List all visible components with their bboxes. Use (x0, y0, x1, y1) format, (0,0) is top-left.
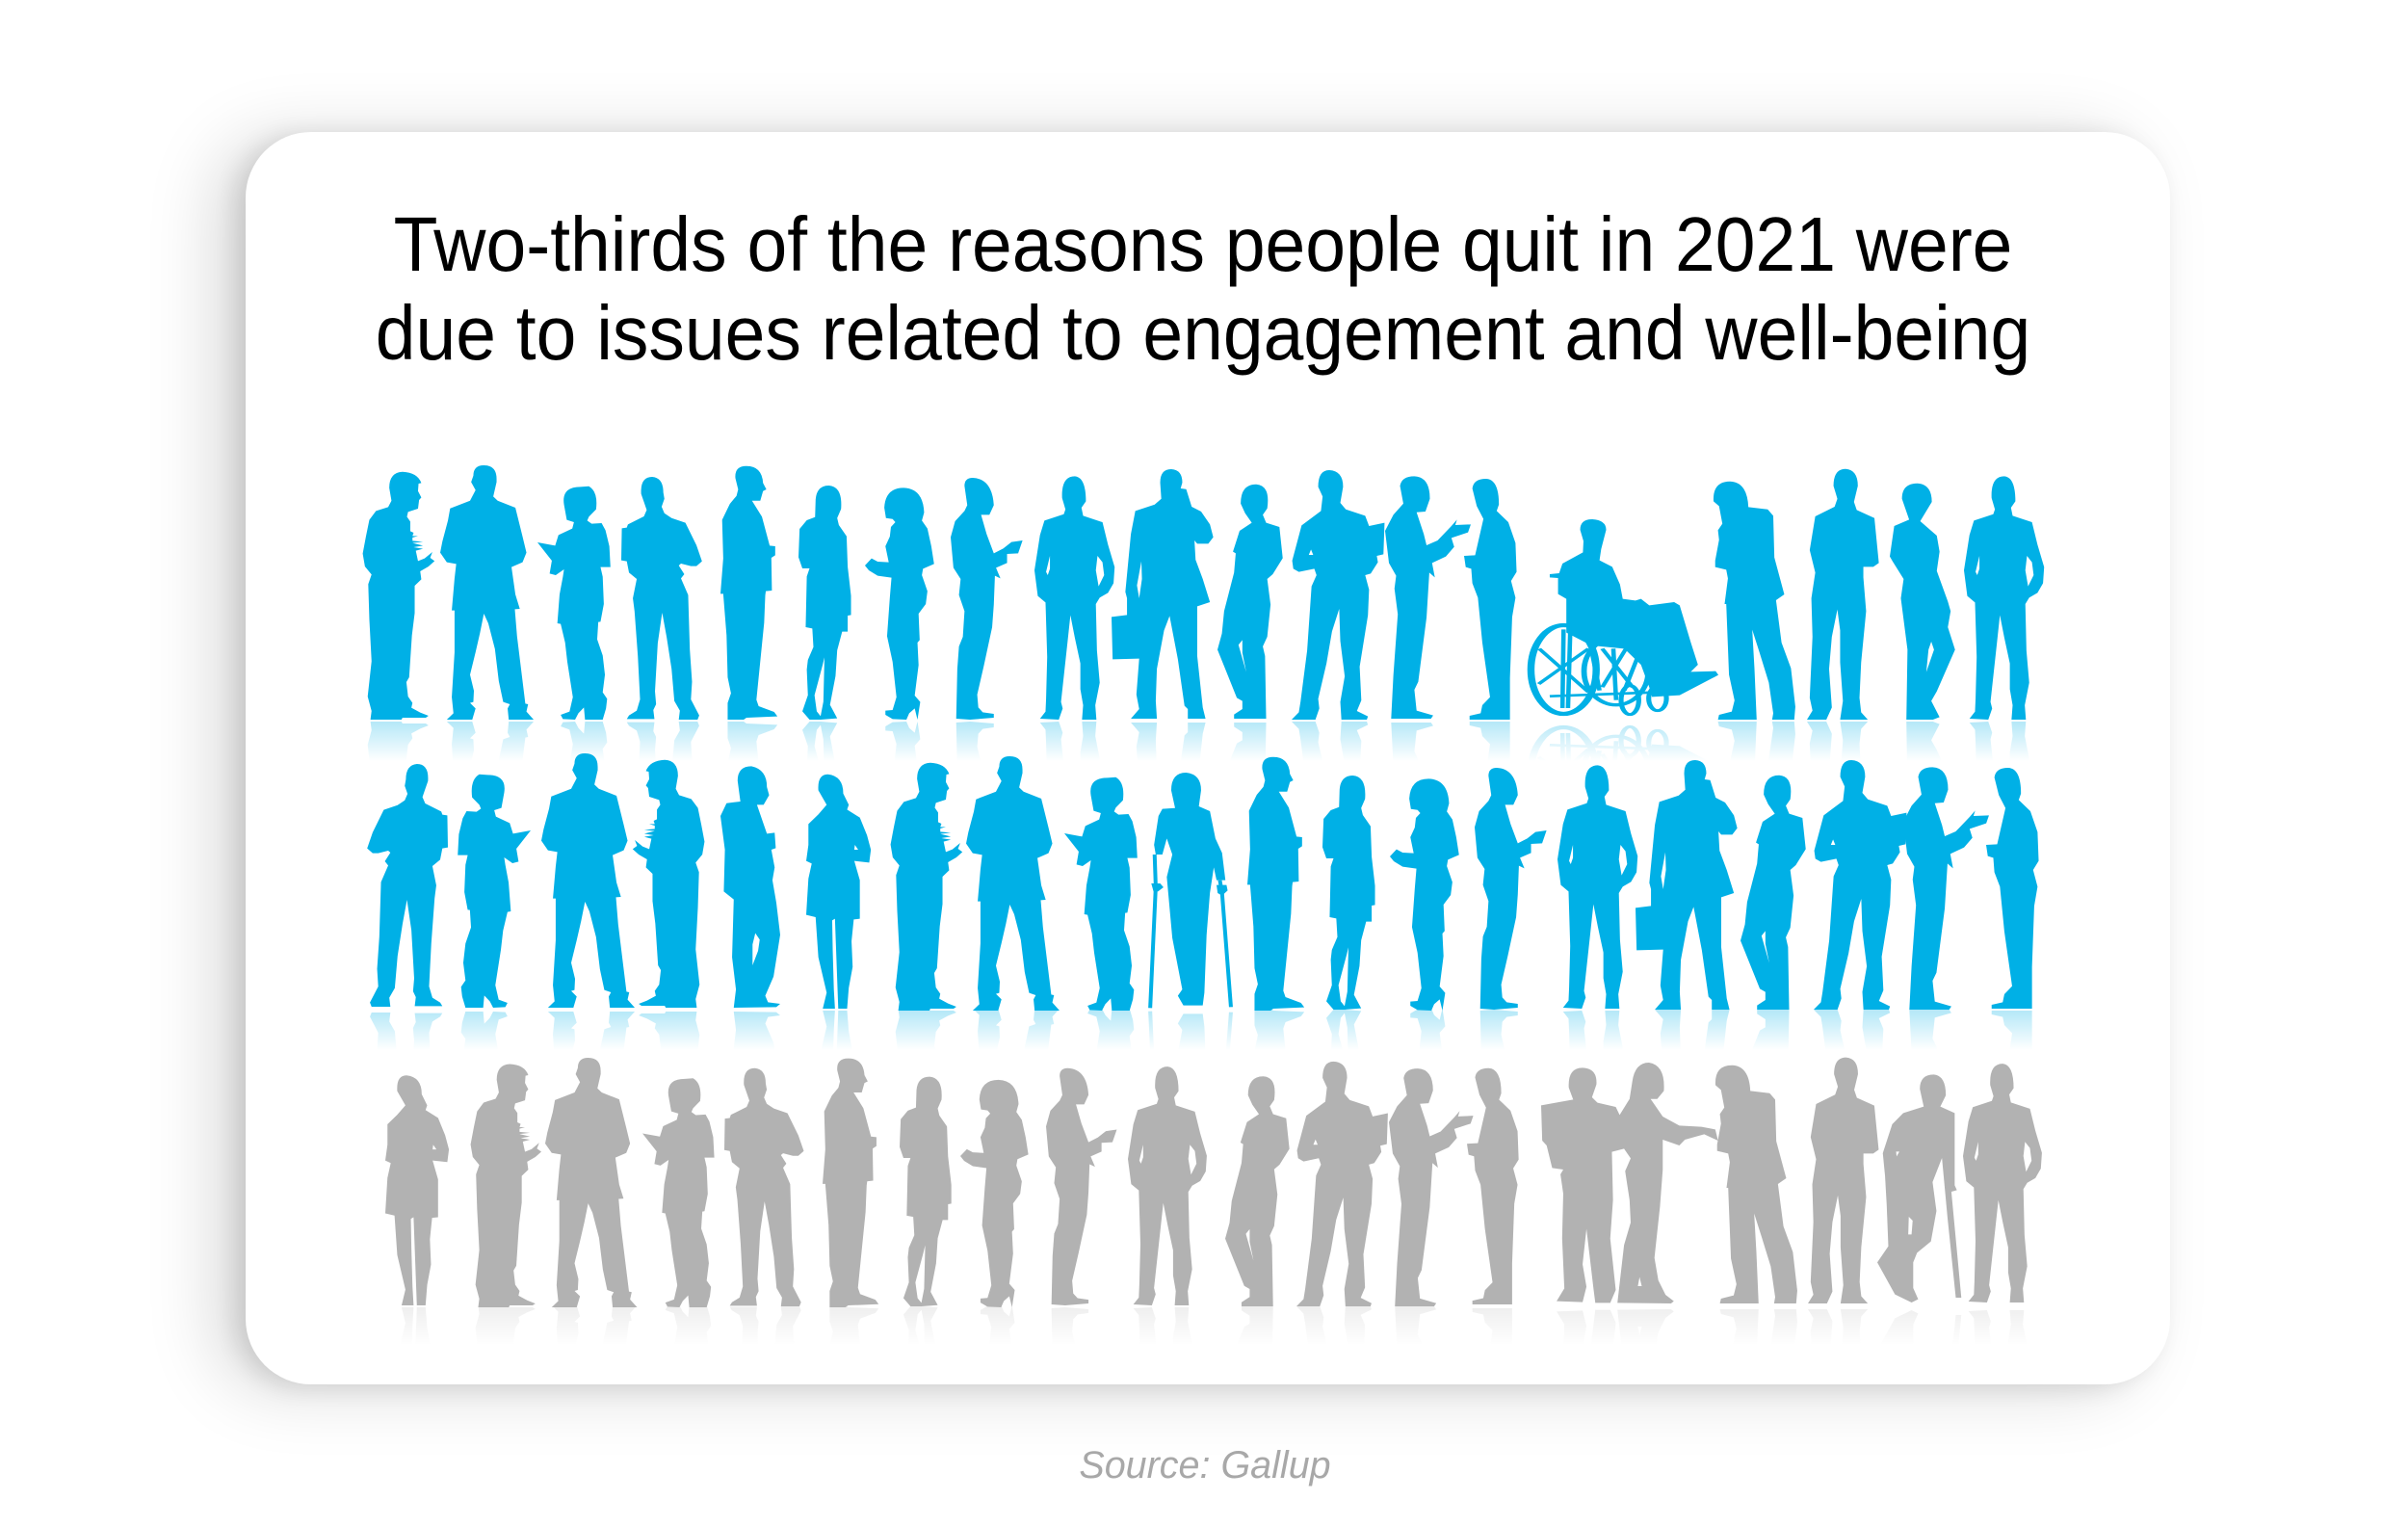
person: man on phone with briefcase (1636, 760, 1738, 1010)
person: man pointing (1475, 768, 1547, 1010)
person: man in suit (541, 753, 635, 1008)
title: Two-thirds of the reasons people quit in 2021 were (394, 202, 2012, 288)
person: man gesturing (633, 760, 704, 1008)
person: man holding folder (1292, 470, 1384, 720)
person: woman standing (1890, 484, 1955, 720)
person: man gesturing (363, 472, 434, 720)
person: tall man in profile (720, 466, 777, 720)
person: woman leaning (1741, 776, 1806, 1010)
person: man hands in pockets (1964, 476, 2044, 720)
person: man with cup (1464, 479, 1517, 720)
source note: Source: Gallup (1079, 1444, 1331, 1487)
person: man pointing (951, 478, 1023, 720)
person: man seen from side (1714, 482, 1795, 720)
row 2: blue silhouettes of people (367, 753, 2039, 1011)
person: tall man in profile (823, 1059, 878, 1307)
person: woman holding cup (960, 1080, 1029, 1307)
person: tall man in profile (1247, 757, 1304, 1011)
person: woman in profile (900, 1077, 952, 1306)
title (376, 202, 2030, 377)
title: due to issues related to engagement and well-being (376, 291, 2030, 377)
person: woman leaning (1225, 1076, 1290, 1306)
person: man holding folder (1296, 1062, 1388, 1306)
person: man hands in pockets (1034, 476, 1114, 720)
person: man with crutch (1877, 1074, 1961, 1302)
row 2 floor reflection (370, 1010, 2032, 1046)
person: woman in dress (385, 1075, 449, 1305)
person: man in wheelchair (1531, 519, 1718, 715)
person: man with folder (367, 764, 448, 1007)
person: woman holding cup (1390, 778, 1459, 1011)
person: man talking with raised hand (1389, 1068, 1474, 1306)
person: man gesturing (891, 763, 962, 1011)
person: man talking with raised hand (1903, 767, 1989, 1010)
person: man in suit (966, 756, 1060, 1011)
person: man in suit (545, 1058, 637, 1307)
person: woman with clipboard (1064, 777, 1138, 1011)
person: woman with clipboard (458, 775, 531, 1008)
row 3 floor reflection (402, 1306, 2024, 1326)
person: man with cup (1986, 768, 2039, 1009)
person: man hands in pockets (1557, 765, 1637, 1009)
person: man with folder (724, 1068, 803, 1306)
person: woman holding cup (865, 487, 934, 720)
person: woman in profile (798, 486, 851, 720)
person: man standing (1808, 1058, 1878, 1303)
person: man with folder (621, 477, 702, 720)
person: man hands in pockets (1128, 1066, 1207, 1305)
person: woman with crutches (1150, 773, 1231, 1008)
persons: two men shaking hands (1541, 1063, 1718, 1303)
person: man holding folder (1814, 760, 1906, 1010)
person: woman in profile (1322, 776, 1375, 1010)
person: woman with clipboard (642, 1078, 715, 1307)
person: man with crossed leg (720, 766, 780, 1008)
person: man with cup (1467, 1068, 1519, 1304)
person: man on phone with briefcase (1112, 469, 1214, 719)
person: man gesturing (471, 1065, 541, 1307)
row 3: gray silhouettes of people (385, 1058, 2042, 1307)
person: man talking with raised hand (1385, 476, 1471, 719)
row 1 floor reflection (368, 722, 2028, 757)
person: woman with clipboard (537, 487, 611, 720)
person: man standing (1807, 469, 1879, 720)
person: man pointing (1046, 1068, 1116, 1305)
person: woman in dress (806, 775, 871, 1009)
person: man in suit (440, 465, 534, 720)
panel: white rounded card with shadow (246, 132, 2170, 1384)
row 1: blue silhouettes of people (363, 465, 2044, 720)
person: man seen from side (1715, 1066, 1797, 1303)
person: woman leaning (1217, 485, 1283, 719)
person: man hands in pockets (1963, 1064, 2042, 1302)
